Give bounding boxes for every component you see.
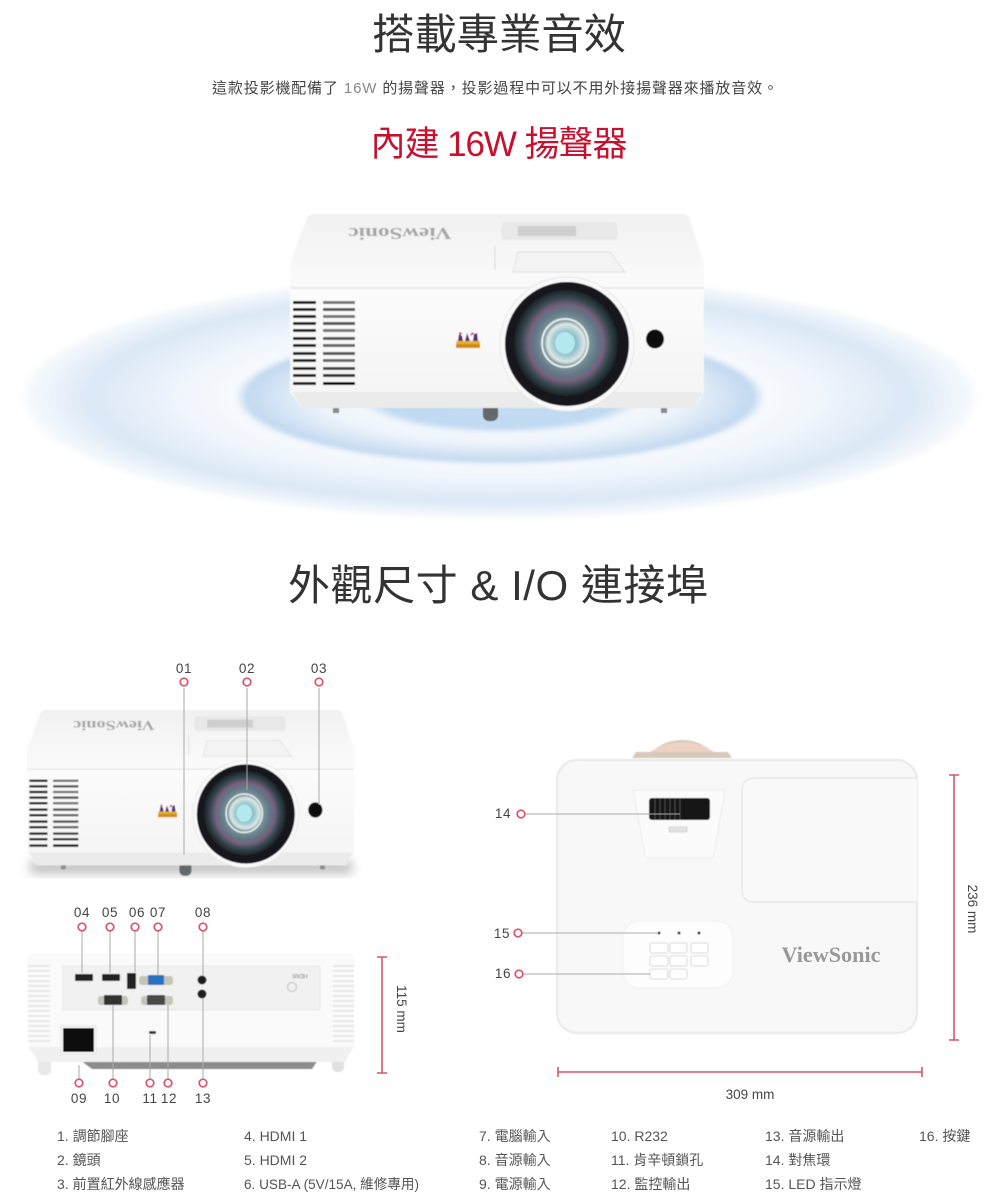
hero projector bbox=[290, 214, 704, 421]
legend column 2 bbox=[244, 1128, 419, 1192]
callouts 04 to 13: 11 bbox=[142, 1091, 158, 1106]
sound ripples bbox=[18, 274, 982, 520]
title: 搭載專業音效: 搭載專業音效 bbox=[372, 11, 626, 58]
legend column 4: 10. R232 bbox=[611, 1128, 668, 1144]
top view projector body bbox=[557, 760, 917, 1033]
ViewSonic logotype: ViewSonic bbox=[782, 942, 881, 967]
legend column 3: 7. 電腦輸入 bbox=[479, 1128, 551, 1144]
callouts 14 15 16 bbox=[494, 806, 680, 981]
legend column 2: 5. HDMI 2 bbox=[244, 1152, 307, 1168]
callouts 14 15 16: 15 bbox=[494, 926, 510, 941]
rear view diagram bbox=[27, 905, 409, 1106]
callouts 04 to 13: 07 bbox=[150, 905, 166, 920]
callouts 04 to 13: 12 bbox=[161, 1091, 177, 1106]
legend list of parts bbox=[57, 1128, 970, 1192]
legend column 2: 6. USB-A (5V/15A, 維修專用) bbox=[244, 1176, 419, 1192]
height dimension 236 mm bbox=[949, 775, 980, 1040]
callouts 04 to 13: 06 bbox=[129, 905, 145, 920]
legend column 3: 9. 電源輸入 bbox=[479, 1176, 551, 1192]
section heading: 外觀尺寸 & I/O 連接埠: 外觀尺寸 & I/O 連接埠 bbox=[288, 562, 708, 609]
callouts 14 15 16: 14 bbox=[495, 806, 511, 821]
legend column 4: 12. 監控輸出 bbox=[611, 1176, 690, 1192]
top view lens dome bbox=[632, 740, 732, 758]
rear view projector body bbox=[27, 953, 355, 1075]
legend column 6: 16. 按鍵 bbox=[919, 1128, 970, 1144]
legend column 2: 4. HDMI 1 bbox=[244, 1128, 307, 1144]
height dimension 115 mm: 115 mm bbox=[394, 985, 409, 1033]
legend column 1: 2. 鏡頭 bbox=[57, 1152, 101, 1168]
front view projector bbox=[27, 710, 354, 876]
callouts 04 to 13: 04 bbox=[74, 905, 90, 920]
callouts 01 02 03: 02 bbox=[239, 661, 255, 676]
top view diagram bbox=[494, 740, 980, 1102]
width dimension 309 mm: 309 mm bbox=[726, 1087, 774, 1102]
height dimension 236 mm: 236 mm bbox=[965, 885, 980, 933]
hero: projector with sound ripples bbox=[18, 214, 982, 520]
legend column 3: 8. 音源輸入 bbox=[479, 1152, 551, 1168]
callouts 01 02 03 bbox=[176, 661, 327, 855]
callouts 04 to 13: 09 bbox=[71, 1091, 87, 1106]
front view shadow bbox=[30, 860, 352, 874]
legend column 3 bbox=[479, 1128, 551, 1192]
legend column 5: 15. LED 指示燈 bbox=[765, 1176, 861, 1192]
legend column 4 bbox=[611, 1128, 703, 1192]
legend column 1 bbox=[57, 1128, 185, 1192]
callouts 04 to 13: 10 bbox=[104, 1091, 120, 1106]
red heading: 內建 16W 揚聲器: 內建 16W 揚聲器 bbox=[370, 125, 628, 164]
callouts 04 to 13: 13 bbox=[195, 1091, 211, 1106]
callouts 14 15 16: 16 bbox=[495, 966, 511, 981]
height dimension 115 mm bbox=[377, 957, 409, 1073]
rear view projector body: HDMI bbox=[292, 972, 308, 978]
callouts 04 to 13: 05 bbox=[102, 905, 118, 920]
legend column 1: 1. 調節腳座 bbox=[57, 1128, 129, 1144]
legend column 5: 13. 音源輸出 bbox=[765, 1128, 844, 1144]
legend column 1: 3. 前置紅外線感應器 bbox=[57, 1176, 185, 1192]
width dimension 309 mm bbox=[558, 1067, 922, 1102]
callouts 04 to 13: 08 bbox=[195, 905, 211, 920]
legend column 4: 11. 肯辛頓鎖孔 bbox=[611, 1152, 703, 1168]
callouts 01 02 03: 01 bbox=[176, 661, 192, 676]
legend column 5 bbox=[765, 1128, 861, 1192]
subtitle text: 這款投影機配備了 16W 的揚聲器，投影過程中可以不用外接揚聲器來播放音效。 bbox=[212, 79, 778, 97]
front view diagram bbox=[27, 661, 354, 876]
legend column 5: 14. 對焦環 bbox=[765, 1152, 830, 1168]
callouts 04 to 13 bbox=[71, 905, 211, 1106]
callouts 01 02 03: 03 bbox=[311, 661, 327, 676]
